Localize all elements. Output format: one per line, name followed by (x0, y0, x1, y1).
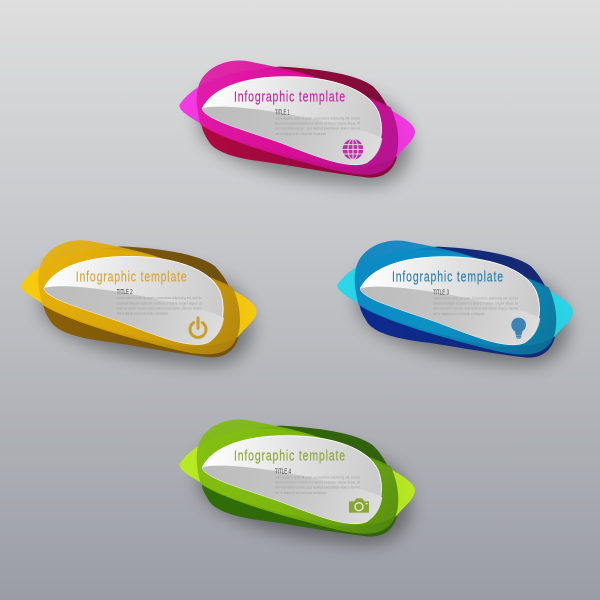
text block: nisi ut aliquip ex ea commodo consequat. (275, 132, 327, 136)
icon: power (190, 318, 206, 337)
text block: TITLE 2 (117, 289, 133, 296)
text block (275, 468, 361, 495)
text block: enim ad minim veniam, quis nostrud exercitation ullamco laboris (275, 127, 360, 131)
text block: enim ad minim veniam, quis nostrud exercitation ullamco laboris (275, 486, 360, 490)
text block: enim ad minim veniam, quis nostrud exercitation ullamco laboris (117, 306, 202, 310)
text block: nisi ut aliquip ex ea commodo consequat. (433, 312, 485, 316)
text block: TITLE 4 (275, 468, 291, 475)
text block: Lorem ipsum dolor sit amet, consectetur adipiscing elit, sed do (117, 296, 202, 300)
panel: badge 3 blue (337, 241, 573, 365)
icon: camera (349, 498, 369, 513)
text block (117, 289, 202, 316)
text block: Lorem ipsum dolor sit amet, consectetur adipiscing elit, sed do (433, 296, 518, 300)
panel: badge 1 magenta (179, 61, 415, 185)
text block: nisi ut aliquip ex ea commodo consequat. (275, 491, 327, 495)
heading: Infographic template (392, 268, 503, 285)
text block (433, 289, 519, 316)
text block: Lorem ipsum dolor sit amet, consectetur adipiscing elit, sed do (275, 475, 360, 479)
text block (275, 109, 361, 136)
icon: globe (343, 139, 363, 160)
text block: TITLE 1 (275, 109, 290, 116)
text block: eiusmod tempor incididunt ut labore et dolore magna aliqua. Ut (117, 301, 202, 305)
text block: TITLE 3 (433, 289, 449, 296)
panel: badge 4 green (179, 420, 415, 544)
heading: Infographic template (234, 88, 345, 105)
heading: Infographic template (234, 447, 345, 464)
icon: light bulb (511, 318, 526, 339)
text block: Lorem ipsum dolor sit amet, consectetur adipiscing elit, sed do (275, 116, 360, 120)
panel: badge 2 gold (21, 240, 257, 365)
text block: eiusmod tempor incididunt ut labore et dolore magna aliqua. Ut (275, 481, 361, 485)
text block: enim ad minim veniam, quis nostrud exercitation ullamco laboris (433, 307, 518, 311)
text block: eiusmod tempor incididunt ut labore et dolore magna aliqua. Ut (275, 122, 361, 126)
text block: nisi ut aliquip ex ea commodo consequat. (117, 312, 168, 316)
heading: Infographic template (76, 267, 187, 285)
text block: eiusmod tempor incididunt ut labore et dolore magna aliqua. Ut (433, 302, 519, 306)
